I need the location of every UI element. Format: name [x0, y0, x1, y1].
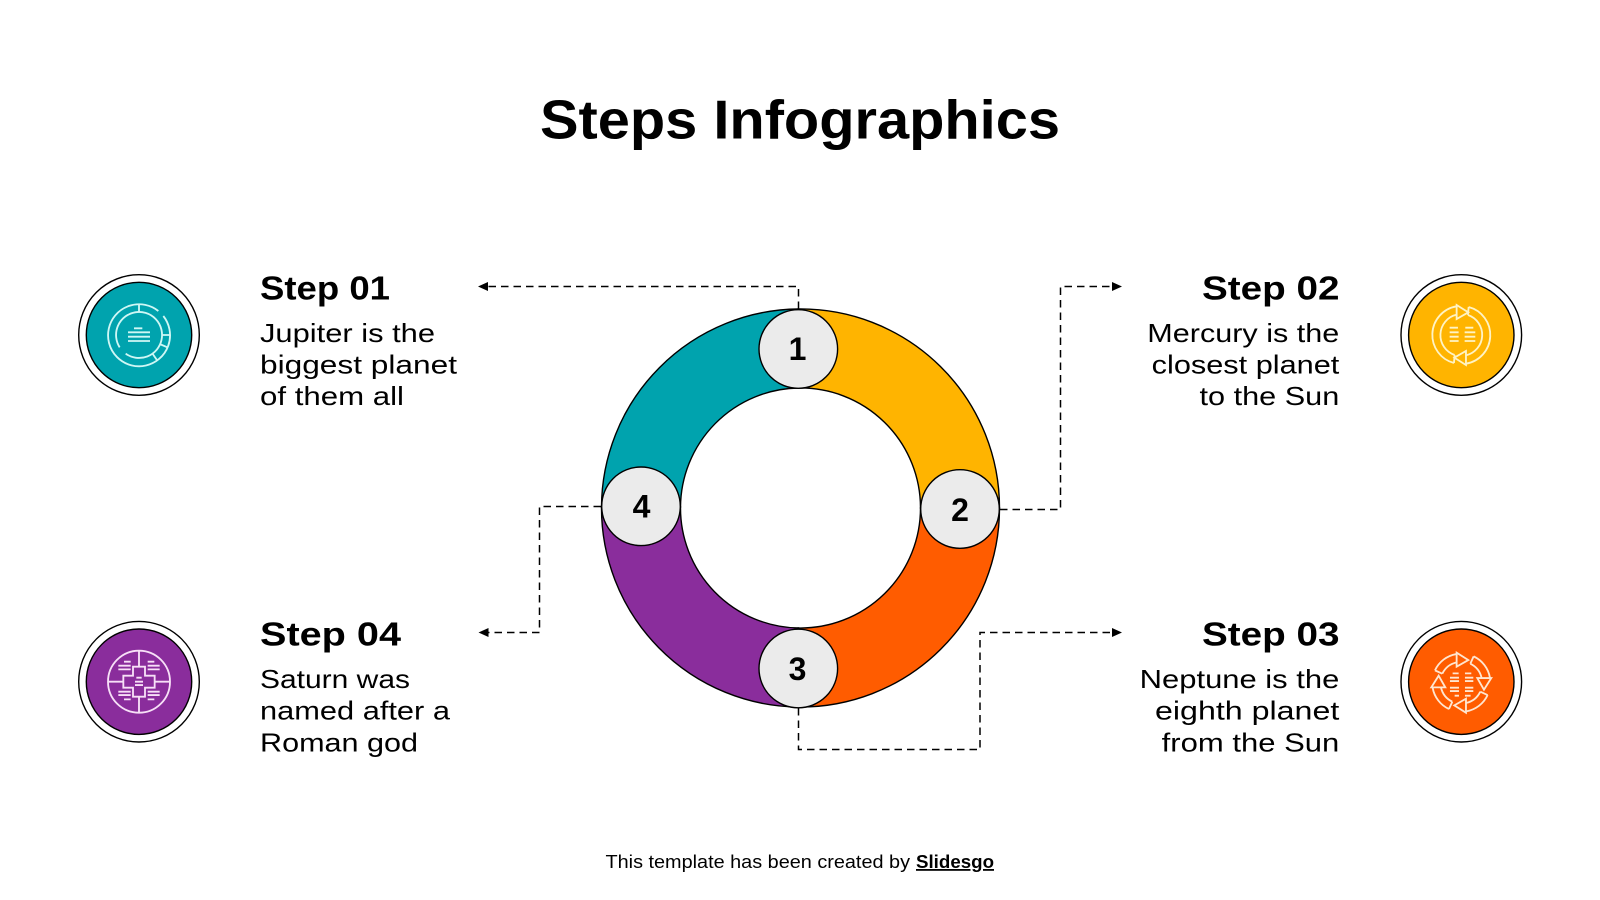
- step 01 text block: [260, 270, 458, 411]
- number badge 4: 4: [633, 488, 651, 524]
- step 03 text block: Neptune is the: [1140, 664, 1339, 694]
- connector arrow: step 4: [478, 506, 601, 637]
- step 02 text block: closest planet: [1152, 350, 1340, 380]
- step 02 text block: Step 02: [1202, 270, 1340, 306]
- step 01 text block: Jupiter is the: [260, 318, 435, 348]
- step 03 text block: eighth planet: [1155, 696, 1340, 726]
- step 03 text block: Step 03: [1202, 616, 1340, 652]
- central ring diagram: [601, 309, 1000, 708]
- step 02 text block: Mercury is the: [1147, 318, 1339, 348]
- title: Steps Infographics: [540, 88, 1060, 150]
- step 02 text block: to the Sun: [1200, 381, 1339, 411]
- icon: teal donut chart badge: [79, 275, 199, 395]
- step 03 text block: [1140, 616, 1340, 757]
- number badge 1: [759, 310, 838, 388]
- connector arrow: step 3: [798, 628, 1122, 750]
- number badge 2: [921, 470, 999, 548]
- step 01 text block: Step 01: [260, 270, 390, 306]
- ring segment: teal: [602, 309, 798, 507]
- step 04 text block: named after a: [260, 696, 451, 726]
- step 04 text block: [260, 616, 451, 757]
- step 04 text block: Saturn was: [260, 664, 410, 694]
- footer credit: This template has been created by: [606, 852, 910, 872]
- ring segment: orange: [798, 508, 1000, 707]
- connector arrow: step 2: [1000, 282, 1122, 510]
- icon: purple quadrant cross badge: [79, 621, 199, 742]
- ring segment: yellow: [798, 309, 1000, 508]
- step 04 text block: Step 04: [260, 616, 402, 652]
- number badge 2: 2: [951, 492, 969, 528]
- icon: yellow two-arrow cycle badge: [1401, 275, 1522, 395]
- number badge 1: 1: [789, 331, 806, 367]
- number badge 3: 3: [789, 651, 806, 687]
- icon: orange four-arrow cycle badge: [1401, 621, 1522, 742]
- connector arrow: step 1: [478, 282, 798, 309]
- ring segment: purple: [601, 507, 798, 707]
- number badge 3: [759, 629, 838, 708]
- step 02 text block: [1147, 270, 1340, 411]
- step 03 text block: from the Sun: [1162, 727, 1339, 757]
- step 01 text block: of them all: [260, 381, 404, 411]
- number badge 4: [602, 467, 680, 546]
- step 04 text block: Roman god: [260, 727, 418, 757]
- footer credit: Slidesgo: [916, 852, 994, 872]
- step 01 text block: biggest planet: [260, 350, 458, 380]
